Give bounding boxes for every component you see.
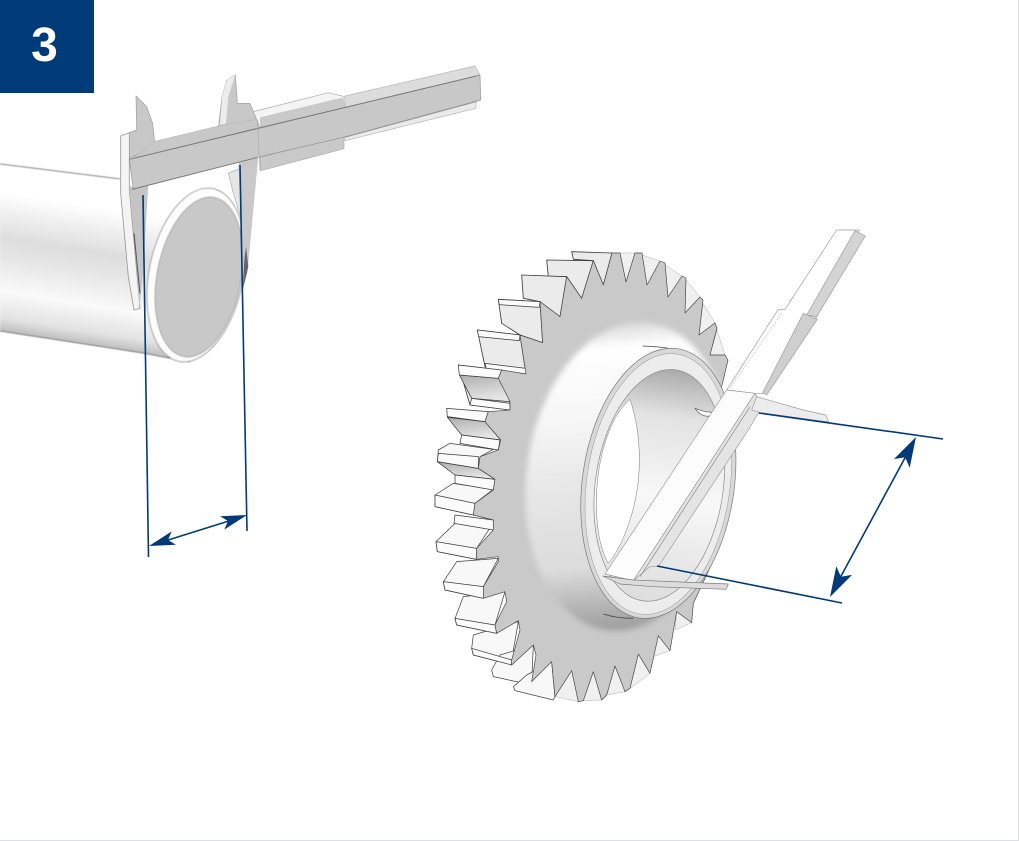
slider lower xyxy=(260,136,344,171)
dimension: gear bore xyxy=(657,413,943,603)
notch walls xyxy=(555,253,725,702)
lower tooth walls xyxy=(435,443,555,700)
hub ring xyxy=(564,338,753,629)
upper tooth walls xyxy=(458,252,612,410)
caliper on gear xyxy=(603,230,865,589)
step number badge: 3 xyxy=(31,19,58,72)
upper hatched strip xyxy=(129,119,260,160)
shaft end face xyxy=(133,180,259,370)
left jaw xyxy=(121,133,148,310)
rail xyxy=(345,66,480,108)
step number badge xyxy=(0,0,94,93)
gray side walls xyxy=(437,375,510,479)
shaft xyxy=(0,164,259,370)
hub boss xyxy=(506,309,751,644)
caliper on shaft xyxy=(121,66,481,310)
caliper rod xyxy=(727,230,859,393)
right jaw xyxy=(228,157,258,290)
main beam xyxy=(129,75,481,189)
upper nibs xyxy=(129,75,257,158)
upper jaw xyxy=(752,397,829,422)
tooth strips xyxy=(435,299,540,665)
gear face xyxy=(473,253,728,702)
caliper beam xyxy=(605,390,755,581)
dimension: shaft diameter xyxy=(143,165,247,557)
bore opening xyxy=(596,399,639,563)
gear xyxy=(435,230,865,702)
slider upper xyxy=(253,93,345,128)
lower jaw xyxy=(603,576,728,589)
